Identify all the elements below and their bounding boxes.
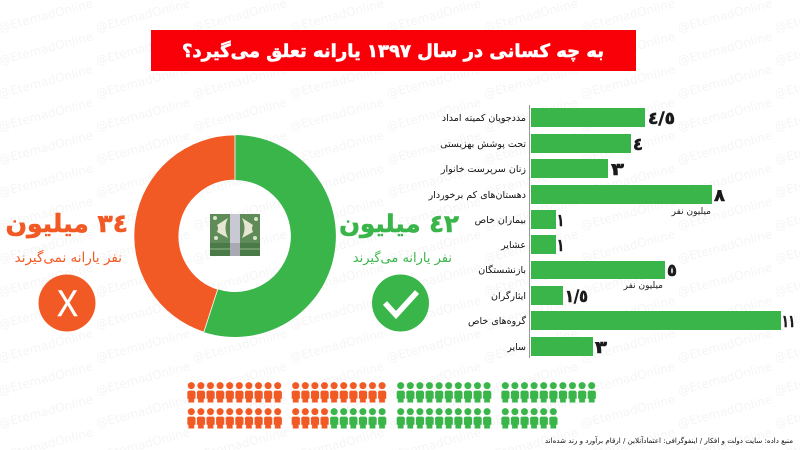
bar: veterans: ۱/٥ (565, 287, 588, 307)
icon: orange cross circle: X (57, 283, 78, 324)
bar: welfare: تحت پوشش بهزیستی (440, 139, 526, 150)
bar: special patients (475, 210, 564, 231)
donut chart (134, 135, 336, 337)
stat: 34 million without subsidy: ٣٤ میلیون (6, 209, 128, 239)
bar chart (428, 105, 795, 358)
stat: 42 million with subsidy: نفر یارانه می‌گیرند (353, 250, 452, 266)
bar: special groups: گروه‌های خاص (468, 315, 526, 327)
icon: banknotes (210, 214, 260, 256)
stat: 42 million with subsidy: ٤٢ میلیون (339, 209, 459, 238)
source note: منبع داده: سایت دولت و افکار / اینفوگرافی: اعتمادآنلاین / ارقام برآورد و رند شده‌اند (545, 435, 793, 445)
bar: welfare: ٤ (633, 135, 643, 155)
icon: green check circle (372, 274, 429, 332)
axis (529, 105, 530, 358)
bar: students (442, 108, 675, 129)
title banner: به چه کسانی در سال ۱۳۹۷ یارانه تعلق می‌گیرد؟ (182, 40, 604, 62)
bar: welfare (440, 134, 643, 155)
bar: nomads: ۱ (557, 236, 564, 256)
bar: students: ٤/٥ (648, 109, 675, 129)
bar: special patients: ۱ (557, 211, 564, 231)
bar: low income villagers: میلیون نفر (671, 207, 711, 217)
bar: others: سایر (506, 342, 526, 353)
bar: others (506, 337, 608, 358)
stat: 34 million without subsidy: نفر یارانه نمی‌گیرند (15, 249, 122, 266)
bar: retirees (478, 261, 677, 291)
bar: others: ٣ (595, 338, 608, 358)
stat: 42 million with subsidy (339, 209, 459, 266)
bar: women heads of household: ٣ (611, 160, 625, 180)
bar: low income villagers: ۸ (714, 186, 726, 206)
bar: veterans: ایثارگران (491, 290, 526, 302)
icon: orange cross circle (38, 274, 96, 332)
bar: students: مددجویان کمیته امداد (442, 113, 526, 124)
bar: retirees: ٥ (667, 261, 677, 281)
bar: nomads (500, 235, 564, 256)
bar: nomads: عشایر (500, 240, 526, 251)
stat: 34 million without subsidy (6, 209, 128, 266)
bar: special patients: بیماران خاص (475, 215, 526, 226)
title banner (151, 30, 636, 71)
bar: low income villagers (428, 185, 726, 217)
bar: retirees: میلیون نفر (623, 281, 663, 291)
bar: special groups (468, 311, 795, 332)
bar: women heads of household (440, 159, 625, 180)
bar: retirees: بازنشستگان (478, 264, 526, 276)
bar: low income villagers: دهستان‌های کم برخوردار (428, 190, 526, 201)
pictogram of people (187, 382, 597, 429)
bar: veterans (491, 286, 588, 307)
donut segment: orange 34 million (134, 135, 235, 332)
donut segment: green 42 million (204, 135, 336, 337)
bar: women heads of household: زنان سرپرست خانوار (440, 164, 526, 175)
